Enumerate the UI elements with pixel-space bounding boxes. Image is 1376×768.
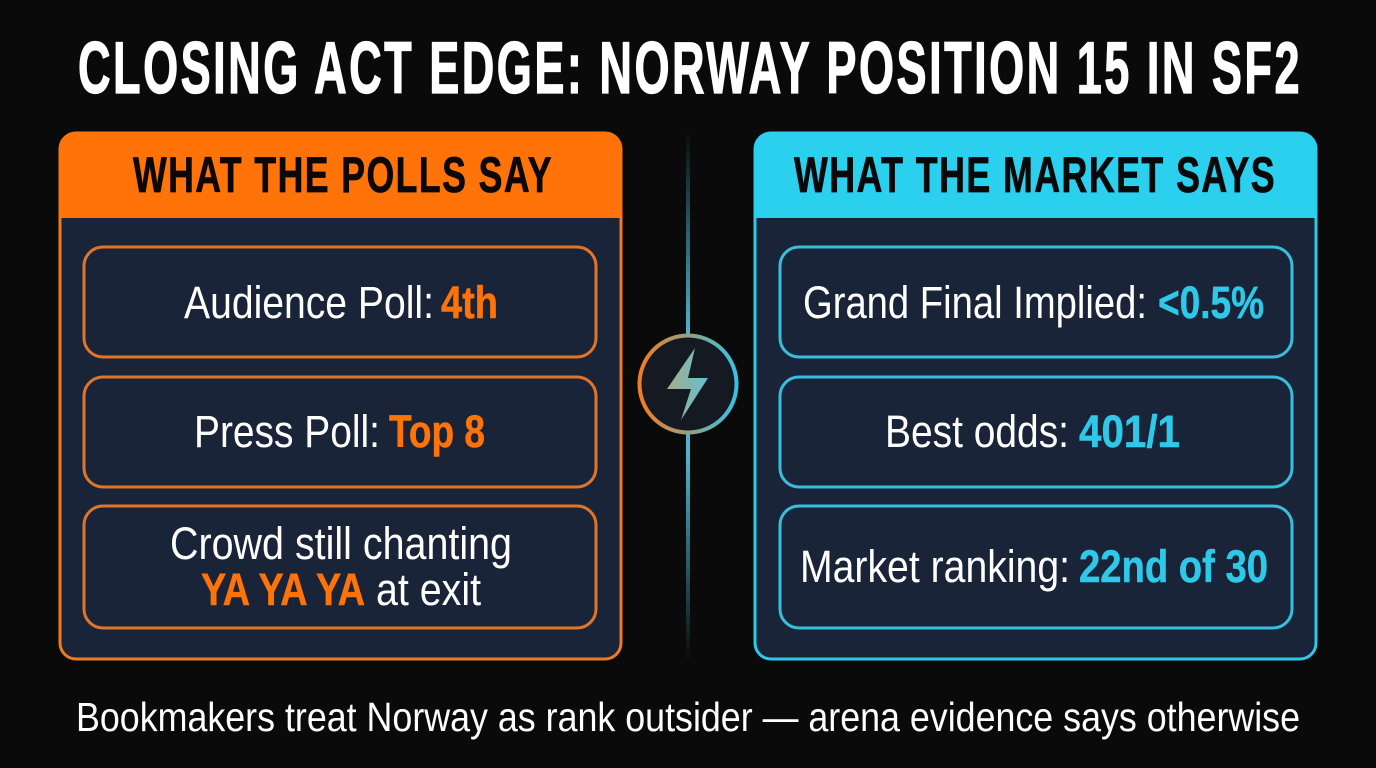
row: audience poll: Audience Poll: [184,277,434,328]
row: audience poll: 4th [441,277,498,328]
row: crowd chanting: at exit [376,564,481,615]
row: market ranking [780,506,1292,628]
row: crowd chanting: YA YA YA [201,564,365,615]
row: market ranking: Market ranking: [800,541,1070,592]
row: grand final implied: <0.5% [1158,277,1264,328]
row: market ranking: 22nd of 30 [1079,541,1268,592]
row: best odds: Best odds: [885,406,1069,457]
row: grand final implied: Grand Final Implied: [803,277,1147,328]
row: audience poll [84,247,596,357]
row: press poll: Press Poll: [194,406,380,457]
row: grand final implied [780,247,1292,357]
panel: what the polls say [59,132,622,659]
divider line [686,132,690,660]
icon: lightning bolt [640,336,736,432]
panel: what the market says [754,132,1317,659]
row: press poll: Top 8 [389,406,485,457]
row: best odds [780,377,1292,487]
row: press poll [84,377,596,487]
panel header: polls [59,132,622,218]
row: best odds: 401/1 [1079,406,1180,457]
row: crowd chanting [84,506,596,628]
heading: what the polls say: WHAT THE POLLS SAY [133,147,553,203]
row: crowd chanting: Crowd still chanting [170,518,512,569]
panel header: market [754,132,1317,218]
